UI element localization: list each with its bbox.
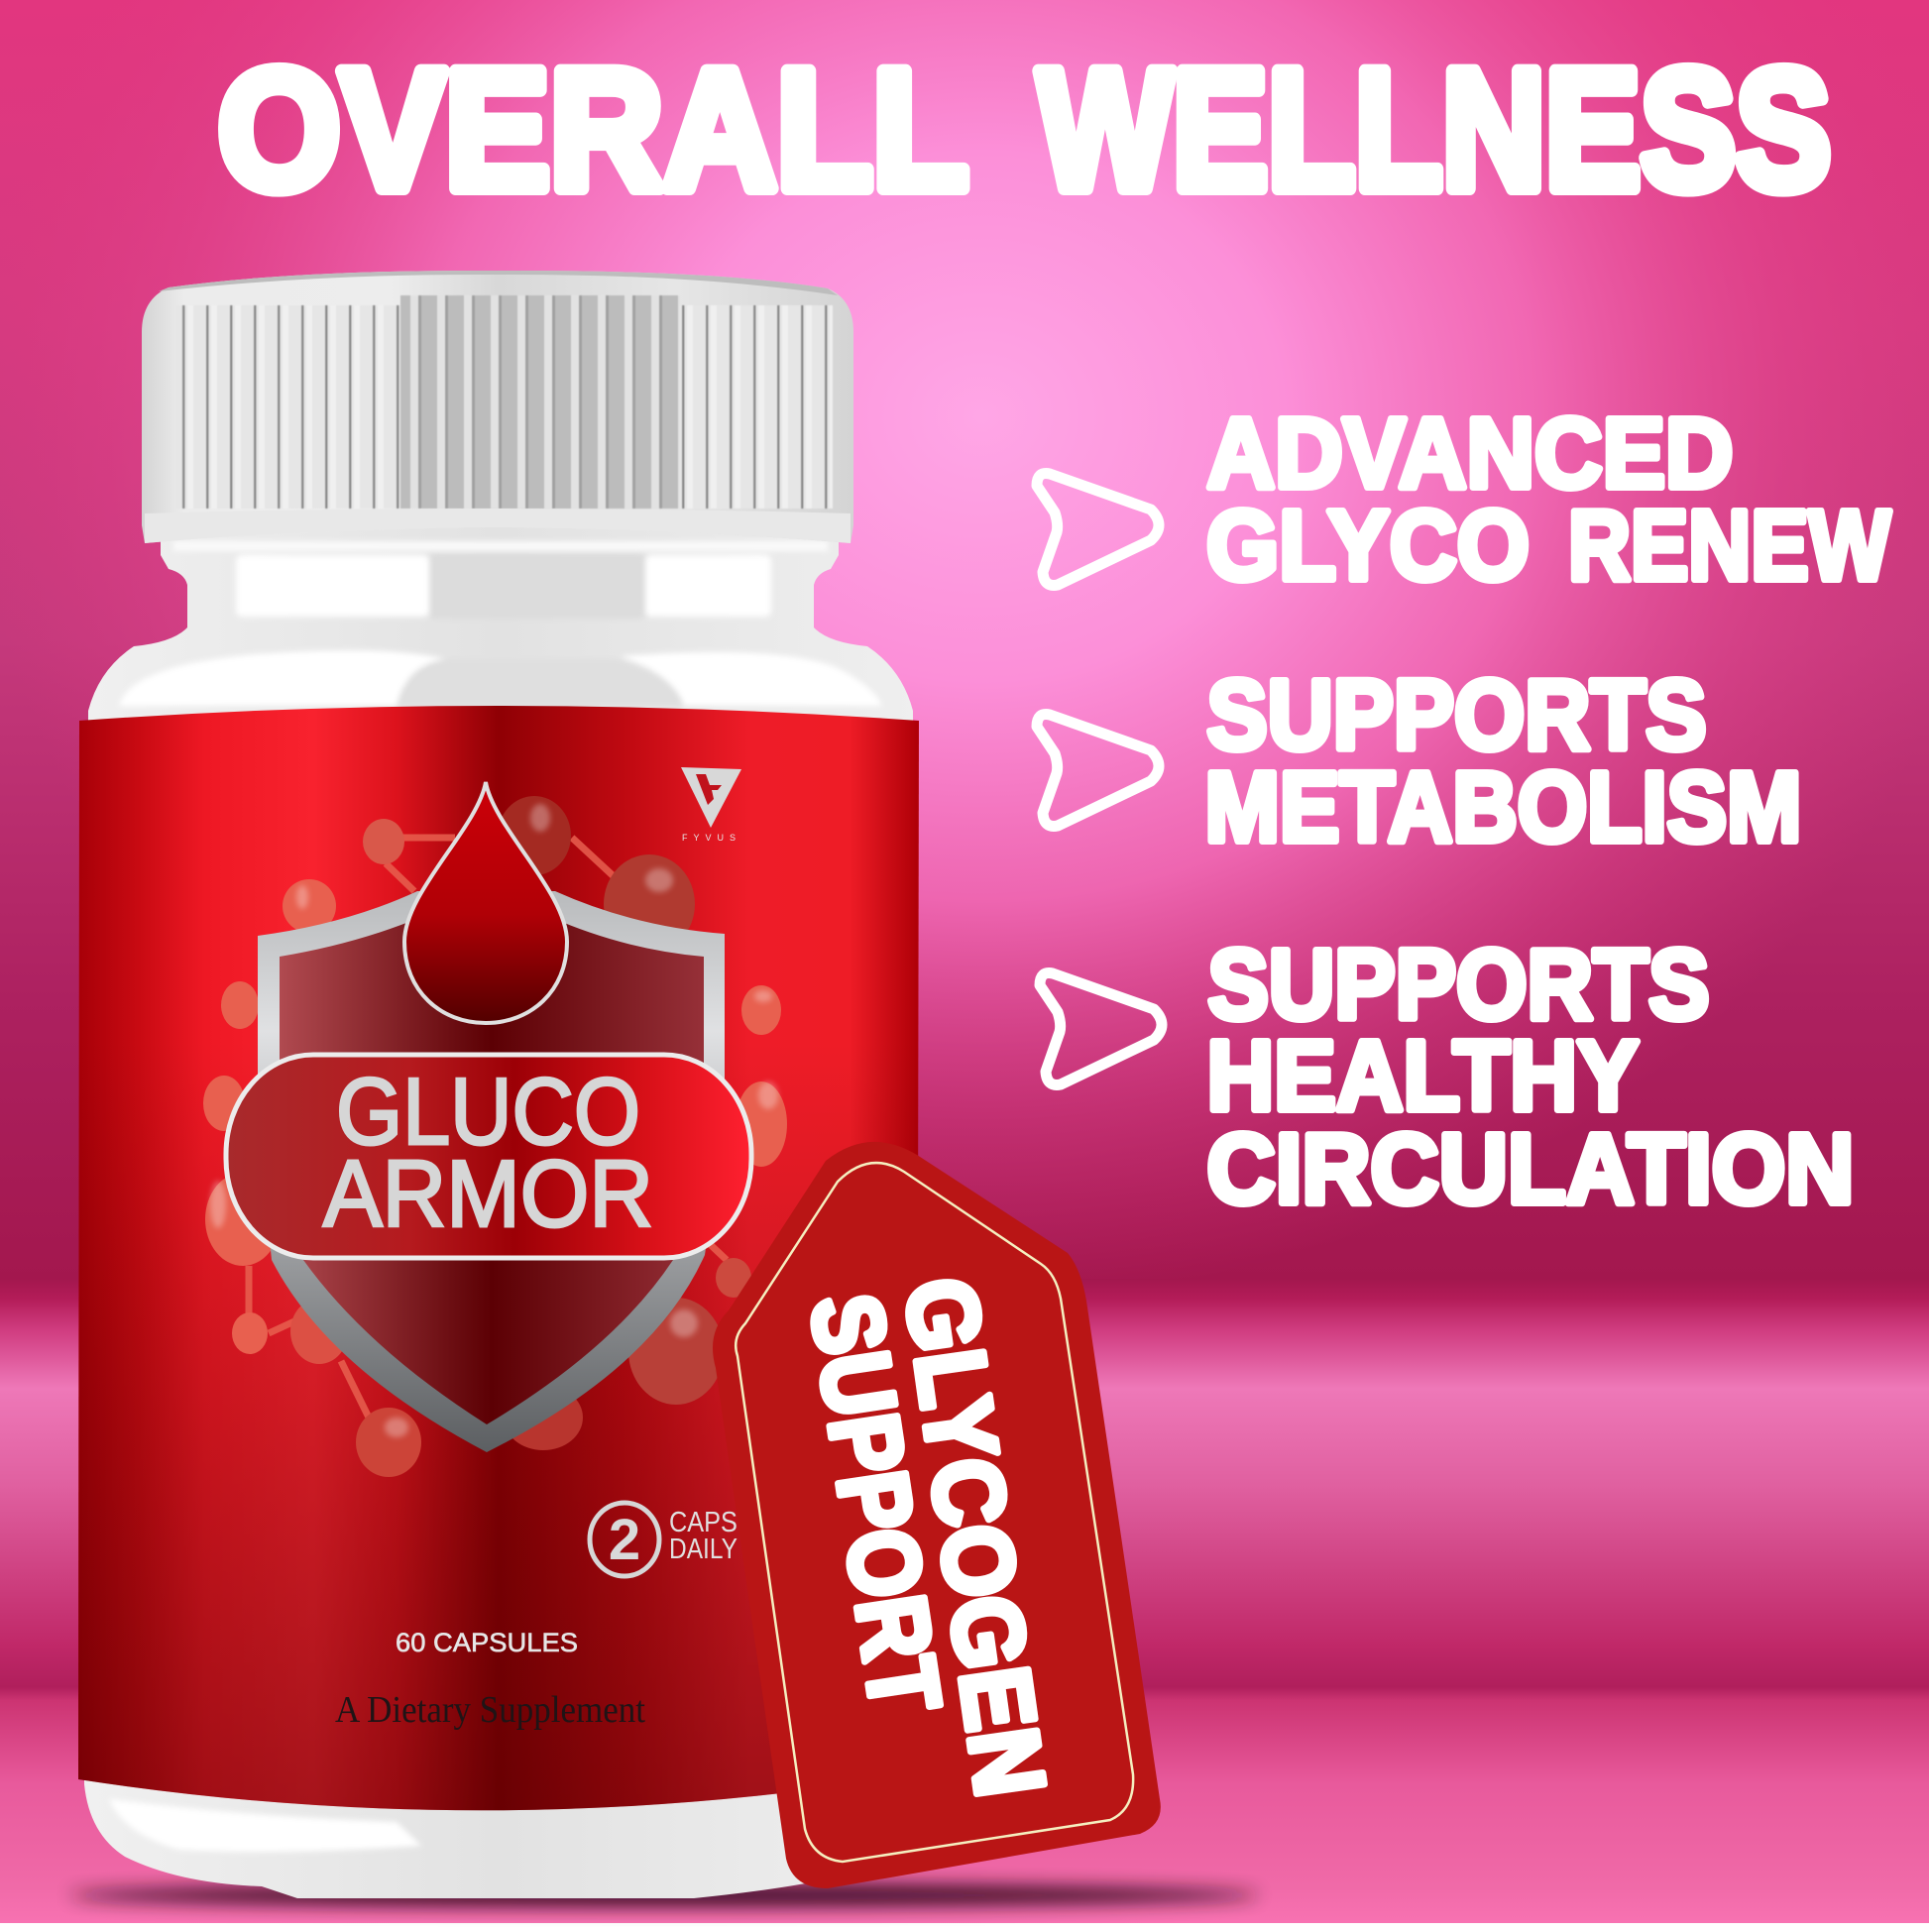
tag text xyxy=(789,1271,1066,1803)
title xyxy=(218,35,1831,225)
dosage badge: 2 xyxy=(609,1508,640,1572)
dosage badge xyxy=(590,1503,803,1576)
benefit 2 xyxy=(1037,660,1802,862)
molecule graphic xyxy=(203,796,787,1477)
benefit 3 xyxy=(1040,930,1854,1225)
tag shape xyxy=(713,1142,1161,1888)
brand logo: FYVUS xyxy=(681,767,741,843)
neck highlights xyxy=(109,541,882,1852)
bottle shadow xyxy=(69,1883,1259,1907)
benefit text xyxy=(1206,398,1891,601)
tag text: GLYCOGEN xyxy=(883,1271,1066,1803)
dosage badge: CAPSULES xyxy=(669,1507,803,1538)
capsule count: 60 CAPSULES xyxy=(396,1628,578,1657)
brand logo: FYVUS: FYVUS xyxy=(682,833,741,843)
cap xyxy=(142,271,853,543)
icon: arrow xyxy=(1040,973,1162,1084)
name pill xyxy=(226,1055,751,1258)
benefit text: GLYCO xyxy=(1206,490,1530,601)
benefit text: METABOLISM xyxy=(1205,751,1802,862)
benefit text xyxy=(1205,660,1802,862)
product name: GLUCO xyxy=(336,1059,640,1165)
product bottle xyxy=(78,271,919,1898)
tag inner line xyxy=(736,1163,1133,1862)
blood drop xyxy=(404,782,567,1023)
benefit text: SUPPORTS xyxy=(1207,930,1709,1041)
dosage badge: DAILY xyxy=(669,1534,738,1565)
benefit text: SUPPORTS xyxy=(1207,660,1707,771)
red label xyxy=(78,706,919,1810)
benefit text: RENEW xyxy=(1568,490,1891,601)
tag: glycogen support xyxy=(713,1142,1161,1888)
shield emblem xyxy=(226,782,751,1452)
title: OVERALL xyxy=(218,35,968,225)
benefit text: ADVANCED xyxy=(1207,398,1733,510)
benefit text xyxy=(1207,930,1854,1225)
benefit 1 xyxy=(1037,398,1891,601)
supplement line: A Dietary Supplement xyxy=(335,1689,645,1731)
benefit text: HEALTHY xyxy=(1207,1021,1640,1132)
tag text: SUPPORT xyxy=(789,1288,962,1720)
bottle body xyxy=(84,520,917,1898)
icon: arrow xyxy=(1037,714,1159,826)
icon: arrow xyxy=(1037,474,1159,585)
shield emblem: ARMOR xyxy=(323,1141,653,1247)
benefit text: CIRCULATION xyxy=(1207,1114,1854,1225)
